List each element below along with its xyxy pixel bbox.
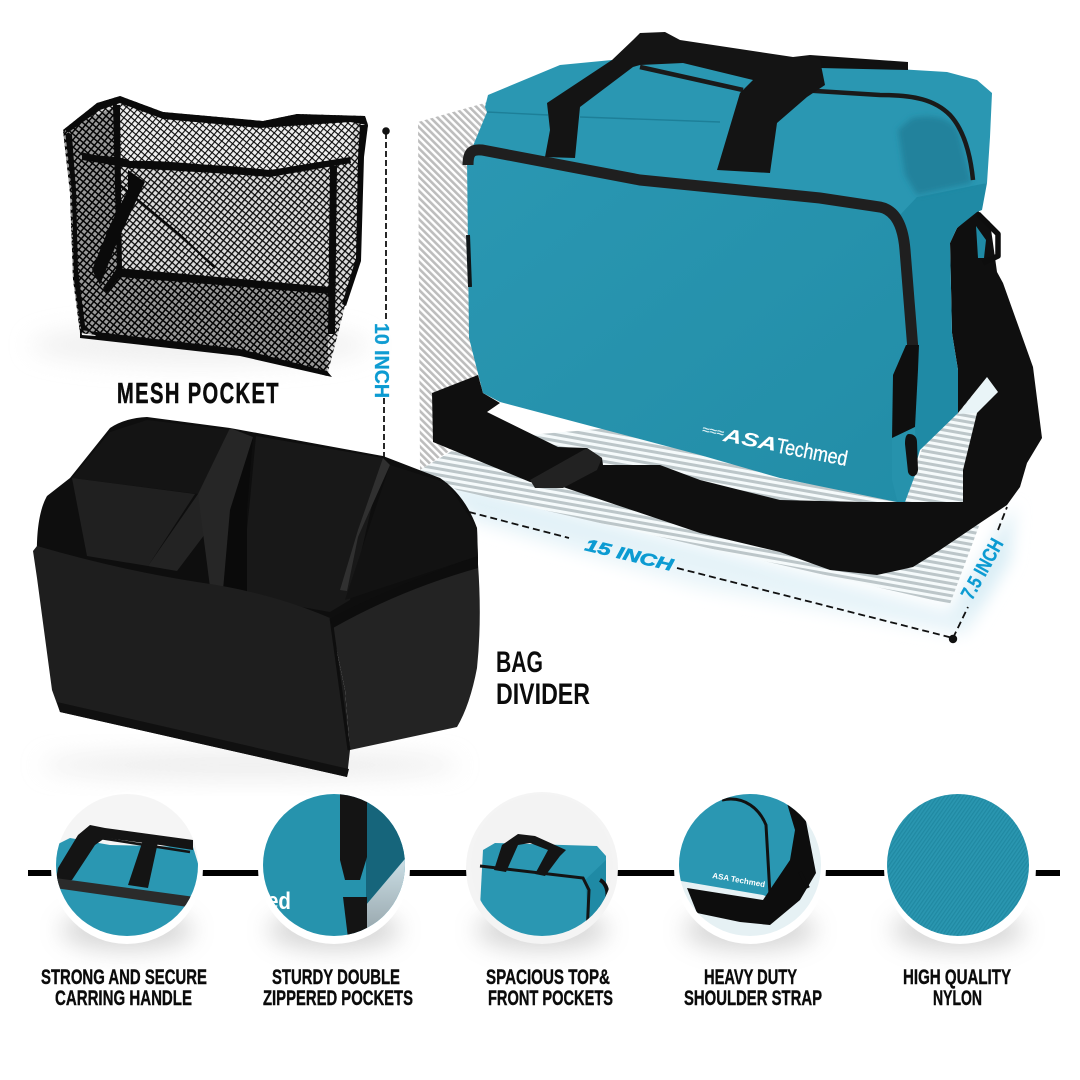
divider interior xyxy=(37,417,478,630)
side panel xyxy=(895,183,987,502)
feature: zippered pockets xyxy=(258,790,410,950)
logo mark: ≈≈≈ xyxy=(701,424,725,440)
upper panel shadow xyxy=(898,116,972,195)
ground shadow xyxy=(30,325,370,365)
inner white xyxy=(958,377,998,414)
timeline bar xyxy=(28,870,1060,876)
mesh bands xyxy=(63,96,368,377)
logo xyxy=(700,420,849,471)
photo: zipper close-up xyxy=(263,794,405,936)
wall hatch xyxy=(418,102,488,470)
right interior xyxy=(345,465,478,600)
shadow xyxy=(892,910,1024,950)
strap buckle xyxy=(530,448,602,488)
zipper slider section xyxy=(892,345,919,440)
photo: zipper close-up: ed xyxy=(267,888,291,915)
mesh pocket xyxy=(30,96,370,377)
disc xyxy=(674,792,826,944)
mesh body xyxy=(63,96,368,376)
caption: strap: HEAVY DUTY xyxy=(704,966,797,989)
shadow xyxy=(61,910,193,950)
feature: spacious pockets xyxy=(466,790,620,950)
disc xyxy=(466,792,618,944)
feature: strong handle xyxy=(50,790,210,950)
side seam xyxy=(331,618,349,750)
photo: handle close-up xyxy=(56,794,198,936)
feature: shoulder strap xyxy=(674,790,826,950)
ring inner teal xyxy=(976,226,986,258)
front panel xyxy=(33,546,350,777)
top zipper xyxy=(640,67,973,180)
photo: strap close-up xyxy=(679,794,821,936)
logo wordmark Techmed: Techmed xyxy=(774,435,849,471)
strap ring xyxy=(978,214,998,263)
photo: small bag xyxy=(480,834,609,936)
heading: bag divider xyxy=(496,646,590,711)
carry handle xyxy=(545,32,825,173)
caption: handle xyxy=(41,966,207,1010)
mesh upper rear xyxy=(116,105,354,170)
dimension: 7.5 inch xyxy=(949,507,1008,643)
dimension: 15 inch xyxy=(469,512,953,638)
shadow xyxy=(476,910,608,950)
mesh crease xyxy=(120,185,215,268)
caption: nylon: HIGH QUALITY xyxy=(903,966,1011,989)
caption: nylon xyxy=(903,966,1011,1010)
heading: mesh pocket: MESH POCKET xyxy=(117,378,280,410)
caption: pockets xyxy=(486,966,613,1010)
shadow xyxy=(684,910,816,950)
zipper pull xyxy=(905,434,918,476)
line two: DIVIDER xyxy=(496,678,590,711)
shadow xyxy=(268,910,400,950)
dimension: 7.5 inch: 7.5 INCH xyxy=(957,535,1008,603)
top of bag xyxy=(468,60,992,215)
disc xyxy=(884,792,1036,944)
caption: pockets: FRONT POCKETS xyxy=(488,987,613,1010)
photo: strap close-up: ASA Techmed xyxy=(712,871,766,889)
caption: zipper: STURDY DOUBLE xyxy=(272,966,400,989)
front panel xyxy=(467,147,918,502)
main bag xyxy=(432,32,1042,575)
line one: BAG xyxy=(496,646,543,679)
mesh left fold xyxy=(63,107,117,333)
partition centre strip xyxy=(223,437,253,596)
rear left wall xyxy=(72,420,230,494)
disc xyxy=(258,792,410,944)
central partition flap xyxy=(148,494,208,571)
caption: nylon: NYLON xyxy=(933,987,982,1010)
left compartment xyxy=(72,478,195,566)
side rim xyxy=(330,556,478,628)
feature: nylon xyxy=(884,792,1036,950)
rear wall xyxy=(240,436,383,612)
caption: strap xyxy=(684,966,822,1010)
top seam xyxy=(487,112,720,122)
caption: pockets: SPACIOUS TOP& xyxy=(486,966,610,989)
floor hatch xyxy=(420,395,998,604)
zipper tab xyxy=(892,427,917,502)
logo wordmark ASA: ASA xyxy=(720,425,779,456)
bag divider xyxy=(33,417,480,779)
photo: fabric swatch xyxy=(887,794,1029,936)
base hem xyxy=(57,702,349,777)
caption: zipper: ZIPPERED POCKETS xyxy=(263,987,413,1010)
carry handle rear band xyxy=(810,55,908,70)
floor glow xyxy=(440,480,1015,635)
dimension: 10 inch xyxy=(370,127,392,458)
caption: handle: CARRING HANDLE xyxy=(55,987,192,1010)
caption: handle: STRONG AND SECURE xyxy=(41,966,207,989)
ground shadow xyxy=(40,751,460,779)
mesh bottom xyxy=(80,272,330,376)
caption: zipper xyxy=(263,966,413,1010)
rear edge shadow xyxy=(468,235,470,287)
wedge fade xyxy=(490,400,925,500)
dimension: 10 inch: 10 INCH xyxy=(370,323,392,398)
partition upper panel xyxy=(198,428,253,590)
right partition xyxy=(340,458,390,591)
shoulder strap xyxy=(432,210,1042,575)
front zipper xyxy=(468,150,913,350)
disc xyxy=(51,792,203,944)
caption: strap: SHOULDER STRAP xyxy=(684,987,822,1010)
hatched dimension backdrop xyxy=(418,102,1015,635)
side panel xyxy=(330,564,480,750)
dimension: 15 inch: 15 INCH xyxy=(583,535,676,575)
